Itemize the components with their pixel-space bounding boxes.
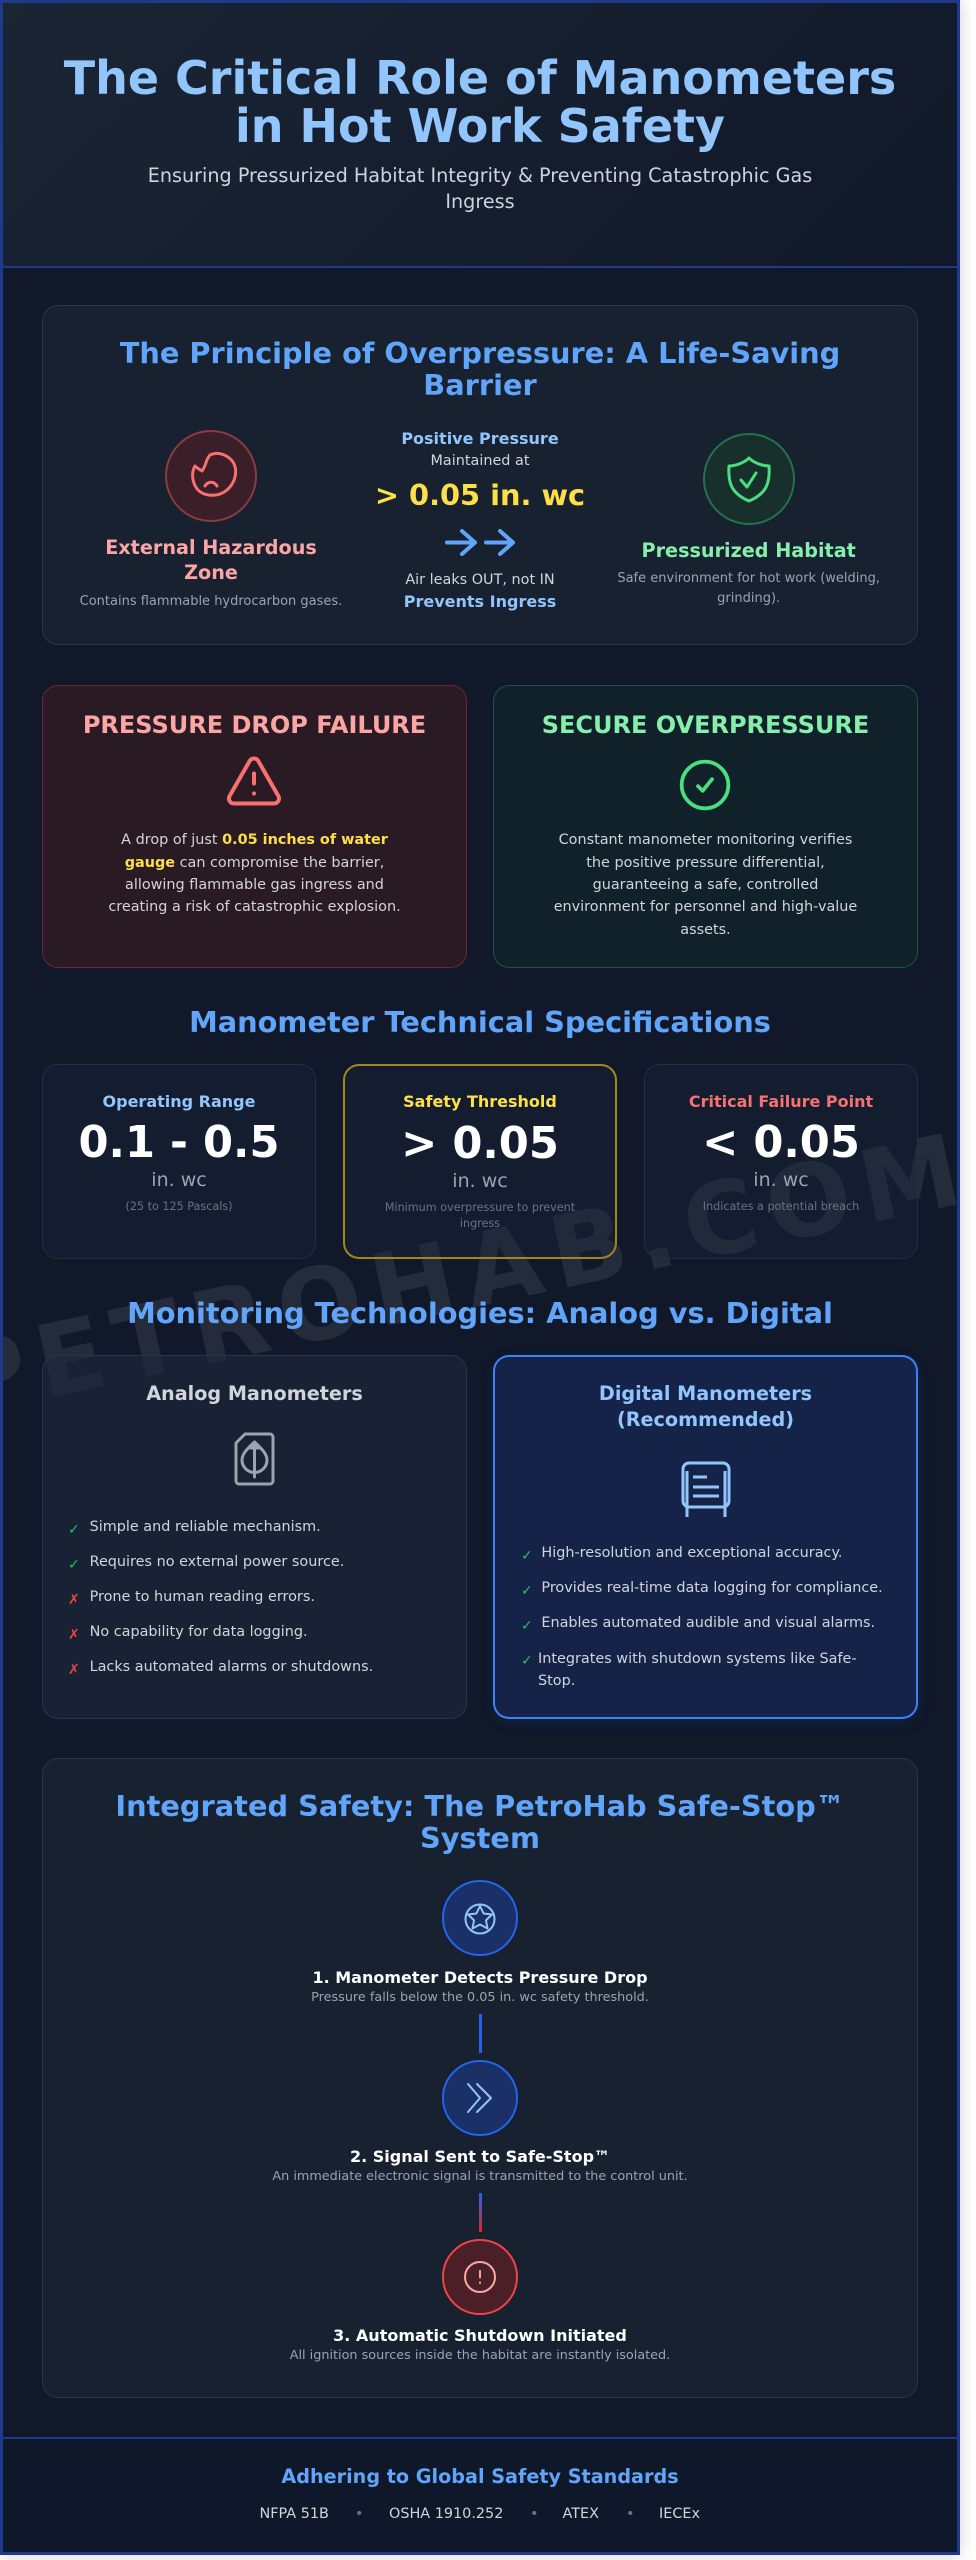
pros and cons list (68, 1519, 373, 1678)
item: High-resolution and exceptional accuracy. (541, 1545, 842, 1561)
value: 0.1 - 0.5 (78, 1118, 280, 1168)
value: > 0.05 (401, 1119, 559, 1169)
features list (521, 1545, 883, 1689)
mark: ✗ (68, 1592, 80, 1608)
subtitle (148, 164, 812, 213)
step 3 icon (442, 2239, 518, 2315)
habitat description: Safe environment for hot work (welding, (617, 571, 880, 586)
note: Minimum overpressure to prevent (385, 1201, 575, 1214)
spec card: critical failure point (644, 1064, 918, 1259)
description (108, 832, 401, 915)
description: environment for personnel and high-value (554, 899, 857, 915)
mark: ✗ (68, 1627, 80, 1643)
mark: ✓ (521, 1583, 533, 1599)
description: Constant manometer monitoring verifies (559, 832, 852, 848)
external zone label (105, 536, 317, 584)
standard: NFPA 51B (260, 2506, 329, 2522)
item: Requires no external power source. (90, 1554, 344, 1570)
mark: ✓ (68, 1522, 80, 1538)
subtitle: Ingress (445, 190, 515, 213)
mark: ✓ (521, 1548, 533, 1564)
spec card: safety threshold (343, 1064, 617, 1259)
step 2 title: 2. Signal Sent to Safe-Stop™ (350, 2147, 610, 2166)
icon: shield (703, 433, 795, 525)
heading (115, 1789, 845, 1855)
step 1 description: Pressure falls below the 0.05 in. wc safety threshold. (311, 1990, 649, 2005)
item: No capability for data logging. (90, 1624, 308, 1640)
item: Enables automated audible and visual alarms. (541, 1615, 875, 1631)
item: Prone to human reading errors. (90, 1589, 315, 1605)
panel: pressure drop failure (42, 684, 467, 968)
pressure value: > 0.05 in. wc (375, 478, 585, 512)
note: (25 to 125 Pascals) (125, 1200, 233, 1213)
title: in Hot Work Safety (235, 98, 725, 152)
item: Stop. (538, 1673, 575, 1689)
heading: Analog Manometers (146, 1382, 363, 1405)
unit: in. wc (452, 1170, 508, 1192)
description: the positive pressure differential, (586, 855, 825, 871)
description: creating a risk of catastrophic explosion. (108, 899, 401, 915)
heading (120, 336, 840, 402)
separator: • (355, 2506, 364, 2522)
note: ingress (460, 1217, 500, 1230)
habitat label: Pressurized Habitat (642, 538, 856, 562)
maintained at: Maintained at (431, 453, 529, 469)
label: Safety Threshold (403, 1092, 557, 1111)
step 3 title: 3. Automatic Shutdown Initiated (333, 2326, 627, 2345)
heading: Integrated Safety: The PetroHab Safe-Stop™ (115, 1789, 845, 1823)
connector 2 (478, 2193, 482, 2232)
header (0, 0, 960, 268)
spec card: operating range (42, 1064, 316, 1259)
mark: ✓ (68, 1557, 80, 1573)
footer heading: Adhering to Global Safety Standards (281, 2465, 679, 2488)
panel: digital manometers (493, 1355, 918, 1719)
item: Provides real-time data logging for compliance. (541, 1580, 883, 1596)
icon: warning triangle (226, 756, 282, 806)
note: Indicates a potential breach (703, 1200, 859, 1213)
mark: ✓ (521, 1653, 533, 1669)
heading: System (420, 1821, 540, 1855)
step 2 icon (442, 2060, 518, 2136)
description: A drop of just 0.05 inches of water (121, 832, 388, 848)
heading: (Recommended) (617, 1408, 794, 1431)
description (554, 832, 857, 938)
item: Integrates with shutdown systems like Safe- (538, 1651, 857, 1667)
external zone description: Contains flammable hydrocarbon gases. (80, 594, 342, 609)
value: < 0.05 (702, 1118, 860, 1168)
icon: flame hazard (165, 430, 257, 522)
description: gauge can compromise the barrier, (125, 855, 384, 871)
heading: The Principle of Overpressure: A Life-Saving (120, 336, 840, 370)
step 1 icon (442, 1880, 518, 1956)
item (538, 1651, 857, 1689)
unit: in. wc (151, 1169, 207, 1191)
footer (0, 2437, 960, 2555)
separator: • (530, 2506, 538, 2522)
note (385, 1201, 575, 1230)
description: guaranteeing a safe, controlled (593, 877, 818, 893)
heading: monitoring technologies: Monitoring Technologies: Analog vs. Digital (127, 1296, 833, 1330)
description: assets. (680, 922, 731, 938)
separator: • (626, 2506, 634, 2522)
pressure label: Positive Pressure (401, 429, 559, 448)
item: Simple and reliable mechanism. (90, 1519, 321, 1535)
label: Operating Range (103, 1092, 255, 1111)
icon: analog gauge (234, 1432, 274, 1486)
description: allowing flammable gas ingress and (125, 877, 384, 893)
heading (599, 1382, 812, 1431)
step 1 title: 1. Manometer Detects Pressure Drop (312, 1968, 648, 1987)
label: Critical Failure Point (689, 1092, 873, 1111)
panel: integrated safety system (42, 1758, 918, 2398)
standard: IECEx (659, 2506, 700, 2522)
step 3 description: All ignition sources inside the habitat are instantly isolated. (290, 2348, 670, 2363)
heading: Digital Manometers (599, 1382, 812, 1405)
standard: OSHA 1910.252 (389, 2506, 503, 2522)
unit: in. wc (753, 1169, 809, 1191)
icon: check circle (680, 760, 730, 810)
heading: SECURE OVERPRESSURE (542, 710, 869, 738)
icon: digital monitor (682, 1462, 730, 1517)
panel: secure overpressure (493, 684, 918, 968)
item: Lacks automated alarms or shutdowns. (90, 1659, 373, 1675)
title: The Critical Role of Manometers (64, 51, 896, 105)
mark: ✓ (521, 1618, 533, 1634)
external zone label: Zone (184, 560, 238, 584)
heading: Barrier (423, 368, 537, 402)
panel: analog manometers (42, 1355, 467, 1719)
subtitle: Ensuring Pressurized Habitat Integrity & Preventing Catastrophic Gas (148, 164, 812, 187)
step 2 description: An immediate electronic signal is transmitted to the control unit. (272, 2169, 688, 2184)
habitat description (617, 571, 880, 606)
prevents ingress: Prevents Ingress (404, 592, 556, 611)
standard: ATEX (562, 2506, 599, 2522)
standards list (260, 2506, 700, 2522)
heading: PRESSURE DROP FAILURE (83, 710, 426, 738)
heading: technical specifications: Manometer Technical Specifications (189, 1005, 771, 1039)
air leaks note: Air leaks OUT, not IN (405, 572, 555, 588)
connector 1 (478, 2014, 482, 2053)
title (64, 51, 896, 152)
mark: ✗ (68, 1662, 80, 1678)
external zone label: External Hazardous (105, 536, 317, 558)
panel: principle of overpressure (42, 305, 918, 645)
arrows (445, 529, 515, 556)
habitat description: grinding). (717, 591, 780, 606)
